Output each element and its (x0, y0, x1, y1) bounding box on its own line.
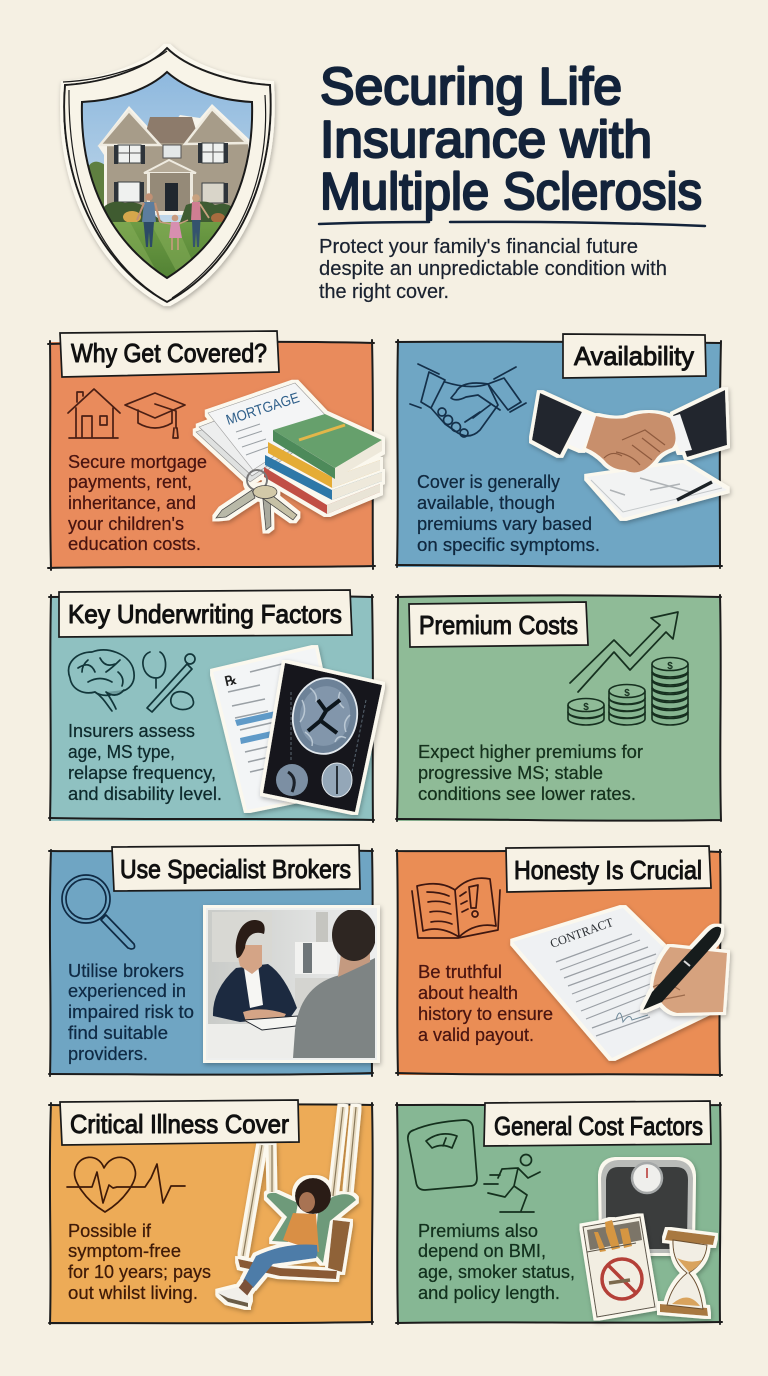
sticker: weighing scale (601, 1160, 693, 1253)
text: general cost factors: age, smoker status, (418, 1261, 575, 1282)
icon: magnifying glass (62, 875, 135, 949)
text: general cost factors: depend on BMI, (418, 1240, 546, 1261)
text: use specialist brokers: experienced in (68, 980, 186, 1001)
shield outer frame (64, 48, 271, 302)
text: honesty is crucial: Be truthful (418, 961, 502, 982)
heading: availability (563, 334, 706, 378)
panel: use specialist brokers (49, 845, 377, 1076)
panel: availability (396, 334, 727, 568)
sticker: signed contract (513, 908, 722, 1058)
title: Multiple Sclerosis (320, 163, 702, 221)
icon: coin stacks: $ (624, 688, 630, 699)
heading: premium costs (409, 602, 588, 647)
icon: open book with exclamation mark (412, 878, 500, 938)
text: key underwriting factors: and disability level. (68, 783, 222, 804)
panel: key underwriting factors (49, 590, 382, 822)
heading: key underwriting factors (59, 590, 352, 637)
icon: stethoscope and reflex hammer (143, 652, 195, 712)
text: honesty is crucial: history to ensure (418, 1003, 553, 1024)
text: why get covered: your children's (68, 513, 184, 534)
text: honesty is crucial: a valid payout. (418, 1024, 534, 1045)
text: key underwriting factors: age, MS type, (68, 741, 175, 762)
photo: broker meeting (206, 908, 377, 1060)
text: availability: available, though (417, 492, 555, 513)
text: critical illness cover: symptom-free (68, 1240, 181, 1261)
text: availability: on specific symptoms. (417, 534, 600, 555)
heading: availability: Availability (574, 341, 694, 371)
subtitle (319, 235, 667, 303)
heading: why get covered (60, 331, 279, 377)
text: critical illness cover: for 10 years; pays (68, 1261, 211, 1282)
text: general cost factors (418, 1220, 575, 1303)
icon: coin stacks (568, 658, 688, 725)
icon: house (68, 389, 120, 438)
text: why get covered: payments, rent, (68, 471, 192, 492)
text: premium costs: progressive MS; stable (418, 762, 603, 783)
heading: honesty is crucial (506, 846, 711, 892)
sticker: mortgage papers, books and keys (196, 383, 382, 530)
title: Securing Life (320, 58, 622, 116)
sticker: hourglass (660, 1230, 715, 1316)
text: premium costs: conditions see lower rates. (418, 783, 636, 804)
sticker: medical report (213, 648, 345, 810)
family figures (137, 193, 209, 250)
title (319, 58, 705, 226)
text: premium costs (418, 741, 643, 804)
panel: critical illness cover (49, 1100, 373, 1324)
icon: running figure (484, 1154, 540, 1212)
sticker: cigarette pack with no smoking sign (583, 1217, 655, 1317)
text: availability: Cover is generally (417, 471, 561, 492)
subtitle: Protect your family's financial future (319, 235, 638, 258)
panel: premium costs (396, 595, 721, 821)
icon: brain (69, 650, 134, 711)
text: key underwriting factors: relapse frequency, (68, 762, 216, 783)
text: why get covered: inheritance, and (68, 492, 196, 513)
text: general cost factors: and policy length. (418, 1282, 560, 1303)
icon: heart with pulse line (67, 1157, 185, 1212)
text: use specialist brokers: providers. (68, 1043, 148, 1064)
text: critical illness cover: out whilst living. (68, 1282, 198, 1303)
sticker: mortgage papers, books and keys: MORTGAGE (224, 390, 302, 429)
icon: graduation cap (125, 393, 185, 438)
text: why get covered: Secure mortgage (68, 451, 207, 472)
text: use specialist brokers: find suitable (68, 1022, 168, 1043)
heading: premium costs: Premium Costs (419, 610, 578, 640)
heading: critical illness cover (60, 1100, 299, 1145)
heading: use specialist brokers (112, 845, 360, 891)
panel: general cost factors (396, 1101, 722, 1324)
text: critical illness cover (68, 1220, 211, 1303)
sticker: MRI brain scan (263, 663, 382, 812)
text: why get covered (68, 451, 207, 554)
text: honesty is crucial (418, 961, 553, 1045)
icon: bathroom scale (408, 1120, 477, 1190)
icon: coin stacks: $ (667, 661, 673, 672)
house and family scene (82, 74, 252, 277)
heading: general cost factors (484, 1101, 711, 1146)
sticker: signed contract: CONTRACT (548, 915, 615, 951)
text: premium costs: Expect higher premiums for (418, 741, 643, 762)
text: why get covered: education costs. (68, 533, 201, 554)
text: general cost factors: Premiums also (418, 1220, 538, 1241)
text: honesty is crucial: about health (418, 982, 518, 1003)
text: use specialist brokers: impaired risk to (68, 1001, 194, 1022)
icon: coin stacks: $ (583, 702, 589, 713)
text: availability (417, 471, 600, 555)
heading: general cost factors: General Cost Factors (494, 1111, 703, 1141)
heading: key underwriting factors: Key Underwriting Factors (68, 599, 342, 629)
text: critical illness cover: Possible if (68, 1220, 152, 1241)
text: use specialist brokers: Utilise brokers (68, 960, 184, 981)
heading: why get covered: Why Get Covered? (71, 338, 267, 368)
shield illustration (63, 48, 271, 302)
subtitle: despite an unpredictable condition with (319, 257, 667, 280)
heading: honesty is crucial: Honesty Is Crucial (514, 855, 702, 885)
text: availability: premiums vary based (417, 513, 592, 534)
heading: critical illness cover: Critical Illness Cover (70, 1109, 289, 1139)
panel: honesty is crucial (396, 846, 727, 1076)
text: use specialist brokers (68, 960, 194, 1064)
text: key underwriting factors (68, 720, 222, 804)
icon: rising arrow (570, 612, 678, 692)
title: Insurance with (320, 111, 652, 169)
sticker: hand holding pen (643, 927, 727, 1013)
sticker: photo handshake and contract (532, 390, 727, 518)
sticker: medical report: ℞ (223, 672, 238, 689)
icon: line handshake (410, 364, 526, 437)
panel: why get covered (48, 331, 382, 570)
subtitle: the right cover. (319, 280, 449, 303)
heading: use specialist brokers: Use Specialist Brokers (120, 854, 351, 884)
text: key underwriting factors: Insurers assess (68, 720, 195, 741)
sticker: woman relaxing on a swing (218, 1107, 356, 1307)
